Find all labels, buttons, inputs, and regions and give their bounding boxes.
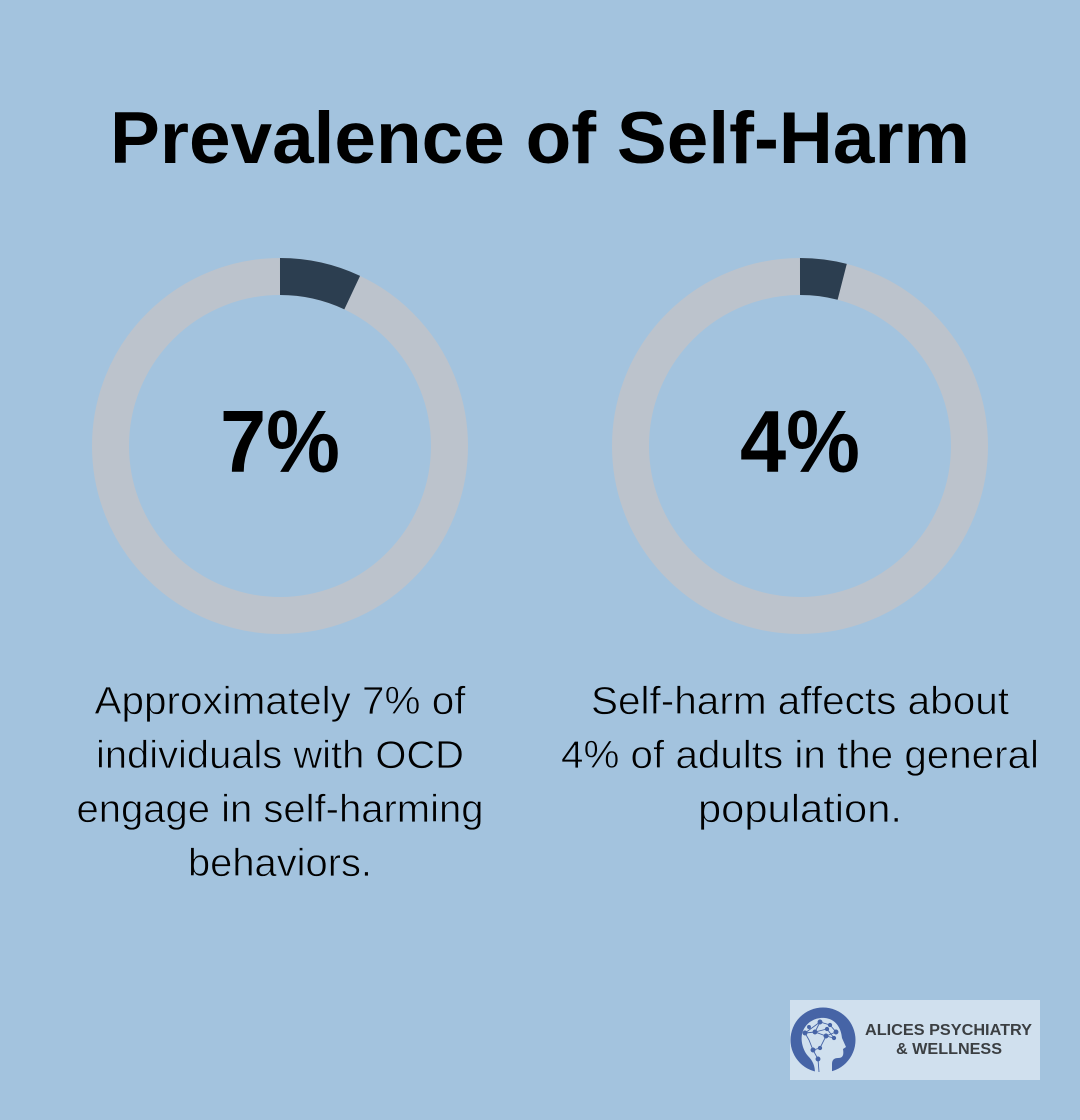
value: 4%: 4% [740, 392, 860, 491]
title: Prevalence of Self-Harm [110, 98, 970, 179]
logo text: & WELLNESS [896, 1041, 1002, 1058]
value: 7%: 7% [220, 392, 340, 491]
description: 7%: Approximately 7% of [94, 680, 466, 723]
description: 7%: engage in self-harming [76, 788, 484, 831]
logo: Alices Psychiatry & Wellness [790, 1000, 1040, 1080]
donut chart: 4% [630, 276, 970, 616]
description: 4%: Self-harm affects about [591, 680, 1009, 723]
description: 4% [561, 680, 1039, 831]
description: 4%: population. [698, 788, 902, 831]
icon: head with neural network [790, 1008, 856, 1073]
description: 7%: behaviors. [188, 842, 372, 885]
panel: 4% statistic [561, 276, 1039, 831]
description: 7% [76, 680, 484, 885]
logo text [865, 1022, 1032, 1058]
logo text: ALICES PSYCHIATRY [865, 1022, 1032, 1039]
description: 4%: 4% of adults in the general [561, 734, 1039, 777]
panel: 7% statistic [76, 276, 484, 885]
donut chart: 7% [110, 276, 450, 616]
description: 7%: individuals with OCD [96, 734, 464, 777]
